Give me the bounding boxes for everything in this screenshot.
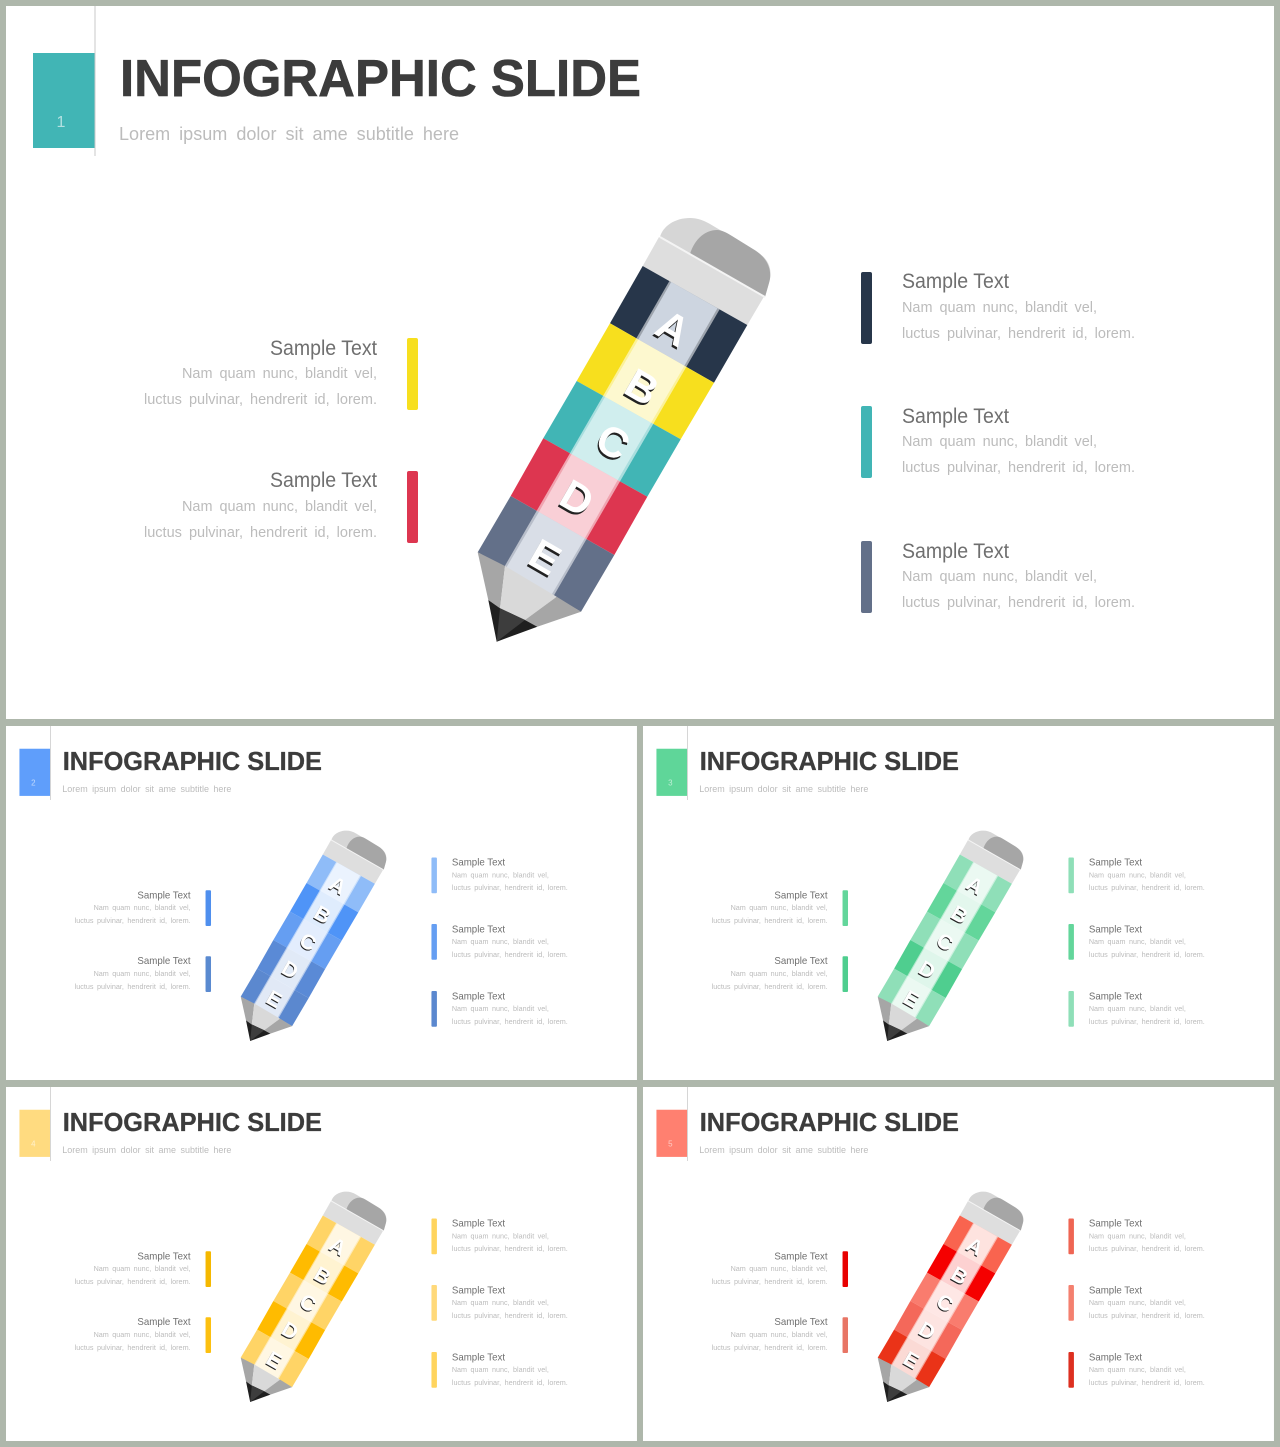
letters bbox=[261, 1233, 350, 1375]
band A bbox=[307, 854, 375, 912]
band E bbox=[478, 496, 614, 612]
right item 2: luctus pulvinar, hendrerit id, lorem. bbox=[452, 1311, 568, 1320]
right item 2: Nam quam nunc, blandit vel, bbox=[1089, 1298, 1186, 1307]
band E bbox=[241, 1330, 309, 1387]
letters: E bbox=[520, 532, 568, 587]
left item 1: Nam quam nunc, blandit vel, bbox=[731, 1264, 828, 1273]
right item 3 bbox=[431, 1352, 568, 1388]
pencil chart bbox=[878, 831, 1023, 1041]
left item: red bbox=[144, 469, 418, 543]
right item: navy: Sample Text bbox=[902, 270, 1009, 293]
right item 3: Nam quam nunc, blandit vel, bbox=[452, 1004, 549, 1013]
subtitle: Lorem ipsum dolor sit ame subtitle here bbox=[119, 124, 459, 144]
left item 1: Sample Text bbox=[774, 891, 828, 902]
title: INFOGRAPHIC SLIDE bbox=[700, 748, 959, 776]
left item 2: Nam quam nunc, blandit vel, bbox=[731, 969, 828, 978]
right item 3: luctus pulvinar, hendrerit id, lorem. bbox=[452, 1017, 568, 1026]
subtitle: Lorem ipsum dolor sit ame subtitle here bbox=[62, 784, 231, 794]
title: INFOGRAPHIC SLIDE bbox=[63, 748, 322, 776]
pencil tip bbox=[878, 1358, 929, 1402]
pencil chart bbox=[878, 1192, 1023, 1402]
band E bbox=[878, 1330, 946, 1387]
left item: red: luctus pulvinar, hendrerit id, lorem. bbox=[144, 525, 377, 541]
letters: D bbox=[277, 1319, 301, 1346]
left item 1: Sample Text bbox=[137, 1252, 191, 1263]
band C bbox=[910, 912, 979, 969]
left item 2: Sample Text bbox=[137, 1317, 191, 1328]
left item 1: Nam quam nunc, blandit vel, bbox=[94, 1264, 191, 1273]
subtitle: Lorem ipsum dolor sit ame subtitle here bbox=[699, 784, 868, 794]
right item 2: Sample Text bbox=[1089, 1285, 1142, 1296]
letters: C bbox=[295, 1290, 320, 1317]
right item: teal: Sample Text bbox=[902, 405, 1009, 428]
right item 1: Sample Text bbox=[452, 1218, 505, 1229]
letters: B bbox=[617, 359, 667, 415]
right item: navy: Nam quam nunc, blandit vel, bbox=[902, 300, 1097, 316]
left item 1 bbox=[712, 1251, 848, 1287]
pencil tip bbox=[241, 1358, 292, 1402]
slide number block: 1 bbox=[57, 114, 66, 131]
right item: teal: Nam quam nunc, blandit vel, bbox=[902, 434, 1097, 450]
pencil chart bbox=[478, 218, 770, 642]
right item 3: Nam quam nunc, blandit vel, bbox=[1089, 1365, 1186, 1374]
left item 1 bbox=[712, 890, 848, 926]
eraser bbox=[643, 218, 770, 325]
title: INFOGRAPHIC SLIDE bbox=[63, 1109, 322, 1137]
band A bbox=[307, 1215, 375, 1273]
right item 2: luctus pulvinar, hendrerit id, lorem. bbox=[1089, 950, 1205, 959]
slide number block bbox=[19, 726, 51, 800]
letters: A bbox=[962, 1233, 987, 1261]
right item 3: luctus pulvinar, hendrerit id, lorem. bbox=[452, 1378, 568, 1387]
letters bbox=[261, 872, 350, 1014]
band C bbox=[910, 1273, 979, 1330]
right item 2 bbox=[1068, 1285, 1205, 1321]
right item 1: Sample Text bbox=[452, 857, 505, 868]
right item 2: Nam quam nunc, blandit vel, bbox=[452, 937, 549, 946]
pencil tip bbox=[241, 997, 292, 1041]
right item 1: Nam quam nunc, blandit vel, bbox=[1089, 1231, 1186, 1240]
left item 1: Nam quam nunc, blandit vel, bbox=[731, 903, 828, 912]
left item: yellow: Nam quam nunc, blandit vel, bbox=[182, 366, 377, 382]
left item 2: Sample Text bbox=[774, 1317, 828, 1328]
letters: D bbox=[552, 470, 602, 526]
centre stripe bbox=[891, 1223, 998, 1379]
right item 2: luctus pulvinar, hendrerit id, lorem. bbox=[452, 950, 568, 959]
letters: E bbox=[261, 1348, 285, 1375]
letters: C bbox=[295, 930, 319, 957]
letters: E bbox=[261, 987, 285, 1014]
left item 1: Sample Text bbox=[137, 891, 191, 902]
right item 2: luctus pulvinar, hendrerit id, lorem. bbox=[1089, 1311, 1205, 1320]
panel: slide 4 (yellow) bbox=[6, 1087, 637, 1441]
right item 1 bbox=[431, 1218, 568, 1254]
letters: A bbox=[962, 873, 986, 901]
band A bbox=[944, 854, 1012, 912]
letters: D bbox=[551, 472, 601, 528]
left item 2: luctus pulvinar, hendrerit id, lorem. bbox=[712, 982, 828, 991]
letters: E bbox=[262, 986, 286, 1013]
centre stripe bbox=[891, 862, 998, 1018]
letters: A bbox=[325, 1234, 349, 1262]
right item 2: Nam quam nunc, blandit vel, bbox=[1089, 937, 1186, 946]
letters: E bbox=[262, 1347, 286, 1374]
left item 1 bbox=[75, 890, 211, 926]
letters: A bbox=[962, 872, 987, 900]
right item 2 bbox=[431, 1285, 568, 1321]
band A bbox=[610, 266, 747, 383]
band C bbox=[543, 381, 681, 497]
right item 1: Sample Text bbox=[1089, 857, 1142, 868]
left item 1 bbox=[75, 1251, 211, 1287]
letters bbox=[898, 1233, 987, 1375]
right item 3: Nam quam nunc, blandit vel, bbox=[452, 1365, 549, 1374]
letters: A bbox=[325, 1233, 350, 1261]
centre stripe bbox=[254, 1223, 361, 1379]
left item 1: Nam quam nunc, blandit vel, bbox=[94, 903, 191, 912]
subtitle: Lorem ipsum dolor sit ame subtitle here bbox=[62, 1145, 231, 1155]
slide number block bbox=[656, 1087, 688, 1161]
left item 1: luctus pulvinar, hendrerit id, lorem. bbox=[75, 916, 191, 925]
letters: D bbox=[914, 958, 938, 985]
left item 1: luctus pulvinar, hendrerit id, lorem. bbox=[75, 1277, 191, 1286]
right item 1: luctus pulvinar, hendrerit id, lorem. bbox=[452, 883, 568, 892]
letters: D bbox=[277, 958, 301, 985]
band B bbox=[290, 1244, 358, 1302]
right item: navy bbox=[861, 270, 1135, 344]
band A bbox=[944, 1215, 1012, 1273]
slide number block: 5 bbox=[668, 1139, 673, 1148]
right item: teal bbox=[861, 405, 1135, 478]
letters: B bbox=[309, 903, 334, 930]
right item 3: luctus pulvinar, hendrerit id, lorem. bbox=[1089, 1017, 1205, 1026]
right item: slate bbox=[861, 540, 1135, 613]
slide number block bbox=[656, 726, 688, 800]
left item: yellow: luctus pulvinar, hendrerit id, lorem. bbox=[144, 392, 377, 408]
letters: E bbox=[521, 530, 569, 584]
band B bbox=[577, 323, 714, 439]
slide number block bbox=[19, 1087, 51, 1161]
pencil tip bbox=[878, 997, 929, 1041]
left item 2 bbox=[712, 956, 848, 992]
letters: D bbox=[914, 1319, 938, 1346]
right item 2: Sample Text bbox=[1089, 924, 1142, 935]
right item 1 bbox=[1068, 857, 1205, 893]
panel: slide 5 (red) bbox=[643, 1087, 1274, 1441]
eraser bbox=[323, 1192, 386, 1245]
band D bbox=[511, 438, 647, 555]
panel: slide 3 (green) bbox=[643, 726, 1274, 1080]
letters: C bbox=[932, 929, 957, 956]
left item 1: luctus pulvinar, hendrerit id, lorem. bbox=[712, 1277, 828, 1286]
right item: teal: luctus pulvinar, hendrerit id, lorem. bbox=[902, 460, 1135, 476]
letters: B bbox=[946, 1264, 971, 1291]
slide number block: 4 bbox=[31, 1139, 36, 1148]
right item 1: Sample Text bbox=[1089, 1218, 1142, 1229]
band D bbox=[894, 1301, 962, 1359]
letters: C bbox=[932, 930, 956, 957]
letters: E bbox=[898, 987, 922, 1014]
left item 2: luctus pulvinar, hendrerit id, lorem. bbox=[712, 1343, 828, 1352]
eraser bbox=[960, 1192, 1023, 1245]
right item 3: luctus pulvinar, hendrerit id, lorem. bbox=[1089, 1378, 1205, 1387]
letters: B bbox=[310, 901, 334, 929]
letters: A bbox=[647, 302, 697, 358]
eraser bbox=[960, 831, 1023, 884]
band D bbox=[894, 940, 962, 998]
pencil tip bbox=[478, 552, 581, 642]
centre stripe bbox=[504, 281, 720, 596]
letters: D bbox=[277, 957, 302, 984]
letters: E bbox=[899, 1347, 923, 1374]
right item 3 bbox=[1068, 991, 1205, 1027]
letters: D bbox=[914, 957, 939, 984]
title: INFOGRAPHIC SLIDE bbox=[700, 1109, 959, 1137]
left item 2: luctus pulvinar, hendrerit id, lorem. bbox=[75, 982, 191, 991]
right item 3: Sample Text bbox=[452, 1352, 505, 1363]
letters: A bbox=[962, 1234, 986, 1262]
letters: C bbox=[588, 414, 638, 470]
band D bbox=[257, 940, 325, 998]
slide number block: 3 bbox=[668, 778, 673, 787]
panel: slide 2 (blue) bbox=[6, 726, 637, 1080]
band C bbox=[273, 1273, 342, 1330]
slide number block bbox=[33, 6, 96, 156]
right item: slate: Nam quam nunc, blandit vel, bbox=[902, 569, 1097, 585]
letters: A bbox=[325, 873, 349, 901]
band E bbox=[878, 969, 946, 1026]
letters: B bbox=[309, 1264, 334, 1291]
band C bbox=[273, 912, 342, 969]
right item 3: Nam quam nunc, blandit vel, bbox=[1089, 1004, 1186, 1013]
left item 1: Sample Text bbox=[774, 1252, 828, 1263]
right item 2: Nam quam nunc, blandit vel, bbox=[452, 1298, 549, 1307]
left item 2: Nam quam nunc, blandit vel, bbox=[731, 1330, 828, 1339]
right item: navy: luctus pulvinar, hendrerit id, lorem. bbox=[902, 326, 1135, 342]
letters: B bbox=[946, 903, 971, 930]
left item 2: luctus pulvinar, hendrerit id, lorem. bbox=[75, 1343, 191, 1352]
left item: yellow bbox=[144, 337, 418, 410]
right item 1: luctus pulvinar, hendrerit id, lorem. bbox=[452, 1244, 568, 1253]
left item 1: luctus pulvinar, hendrerit id, lorem. bbox=[712, 916, 828, 925]
right item: slate: luctus pulvinar, hendrerit id, lorem. bbox=[902, 595, 1135, 611]
eraser bbox=[323, 831, 386, 884]
letters: C bbox=[932, 1291, 956, 1318]
band D bbox=[257, 1301, 325, 1359]
band B bbox=[290, 883, 358, 941]
letters: A bbox=[325, 872, 350, 900]
right item 1 bbox=[1068, 1218, 1205, 1254]
band B bbox=[927, 1244, 995, 1302]
letters: A bbox=[648, 300, 698, 356]
left item: red: Sample Text bbox=[270, 469, 377, 492]
letters bbox=[520, 300, 698, 587]
left item 2: Nam quam nunc, blandit vel, bbox=[94, 969, 191, 978]
right item 2: Sample Text bbox=[452, 924, 505, 935]
letters: D bbox=[277, 1318, 302, 1345]
right item 1 bbox=[431, 857, 568, 893]
letters: C bbox=[587, 416, 637, 472]
right item 3: Sample Text bbox=[1089, 991, 1142, 1002]
left item 2: Nam quam nunc, blandit vel, bbox=[94, 1330, 191, 1339]
left item 2 bbox=[75, 1317, 211, 1353]
left item: red: Nam quam nunc, blandit vel, bbox=[182, 499, 377, 515]
right item 2: Sample Text bbox=[452, 1285, 505, 1296]
letters bbox=[898, 872, 987, 1014]
right item 3: Sample Text bbox=[452, 991, 505, 1002]
right item 1: luctus pulvinar, hendrerit id, lorem. bbox=[1089, 883, 1205, 892]
letters: E bbox=[899, 986, 923, 1013]
letters: D bbox=[914, 1318, 939, 1345]
band E bbox=[241, 969, 309, 1026]
right item: slate: Sample Text bbox=[902, 540, 1009, 563]
pencil chart bbox=[241, 1192, 386, 1402]
letters: E bbox=[898, 1348, 922, 1375]
centre stripe bbox=[254, 862, 361, 1018]
letters: C bbox=[295, 1291, 319, 1318]
subtitle: Lorem ipsum dolor sit ame subtitle here bbox=[699, 1145, 868, 1155]
right item 3 bbox=[1068, 1352, 1205, 1388]
letters: B bbox=[947, 901, 971, 929]
right item 2 bbox=[431, 924, 568, 960]
panel: slide 1 (main) bbox=[6, 6, 1274, 719]
right item 3 bbox=[431, 991, 568, 1027]
left item 2 bbox=[712, 1317, 848, 1353]
left item 2 bbox=[75, 956, 211, 992]
right item 1: Nam quam nunc, blandit vel, bbox=[452, 1231, 549, 1240]
right item 1: Nam quam nunc, blandit vel, bbox=[452, 870, 549, 879]
slide number block: 2 bbox=[31, 778, 36, 787]
right item 1: Nam quam nunc, blandit vel, bbox=[1089, 870, 1186, 879]
left item: yellow: Sample Text bbox=[270, 337, 377, 360]
letters: C bbox=[932, 1290, 957, 1317]
title: INFOGRAPHIC SLIDE bbox=[120, 50, 641, 108]
letters: B bbox=[947, 1262, 971, 1290]
right item 2 bbox=[1068, 924, 1205, 960]
left item 2: Sample Text bbox=[137, 956, 191, 967]
pencil chart bbox=[241, 831, 386, 1041]
band B bbox=[927, 883, 995, 941]
letters: C bbox=[295, 929, 320, 956]
right item 3: Sample Text bbox=[1089, 1352, 1142, 1363]
right item 1: luctus pulvinar, hendrerit id, lorem. bbox=[1089, 1244, 1205, 1253]
letters: B bbox=[616, 361, 666, 417]
left item 2: Sample Text bbox=[774, 956, 828, 967]
letters: B bbox=[310, 1262, 334, 1290]
